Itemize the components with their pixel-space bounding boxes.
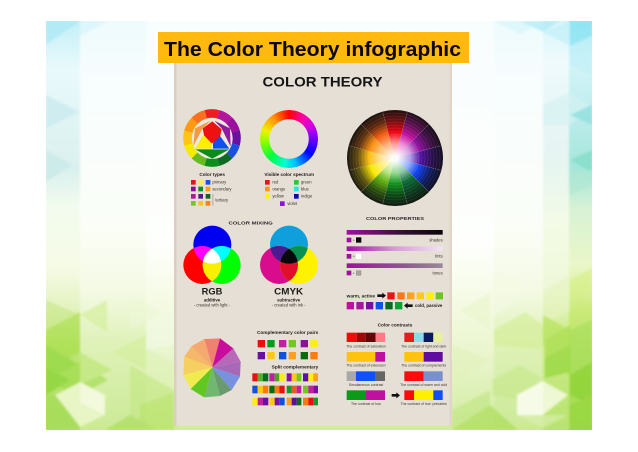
color contrasts xyxy=(346,323,447,406)
poster: color theory xyxy=(174,63,452,426)
CMYK labels: subtractive xyxy=(277,297,301,302)
color properties: tones xyxy=(432,270,443,275)
visible spectrum ring xyxy=(260,110,318,168)
poster heading: COLOR THEORY xyxy=(262,74,383,90)
color properties: tints xyxy=(435,254,443,259)
color contrasts: The contrast of hue xyxy=(351,402,381,406)
color properties: shades xyxy=(429,237,443,242)
visible spectrum legend: Visible color spectrum xyxy=(264,172,314,177)
complementary color pairs xyxy=(257,330,319,359)
visible spectrum legend xyxy=(264,172,314,206)
title banner xyxy=(158,32,469,63)
RGB labels: RGB xyxy=(202,287,223,297)
color mixing: COLOR MIXING xyxy=(228,221,273,227)
color contrasts: The contrast of light and dark xyxy=(401,344,446,348)
visible spectrum legend: green xyxy=(301,179,312,184)
split complementary swatches: Split complementary xyxy=(272,364,319,369)
visible spectrum legend: yellow xyxy=(272,194,285,199)
CMYK labels: CMYK xyxy=(274,287,304,297)
visible spectrum legend: blue xyxy=(301,186,310,191)
color types legend: Color types xyxy=(199,172,225,177)
title banner: The Color Theory infographic xyxy=(164,39,461,61)
color contrasts: Color contrasts xyxy=(378,323,413,329)
warm and cold swatches: warm, active xyxy=(346,294,375,300)
visible spectrum legend: orange xyxy=(272,186,286,191)
RGB labels: additive xyxy=(204,297,221,302)
CMYK labels xyxy=(272,287,306,307)
color properties: + xyxy=(353,254,356,259)
visible spectrum legend: indigo xyxy=(301,194,313,199)
color contrasts: The contrast of warm and cold xyxy=(400,383,447,387)
warm and cold swatches xyxy=(346,292,443,309)
color types legend: primary xyxy=(212,179,227,184)
large tint and shade wheel xyxy=(347,110,443,206)
complementary wheel xyxy=(183,338,241,397)
color types legend: tertiary xyxy=(215,198,229,203)
color mixing xyxy=(183,221,318,307)
visible spectrum legend: violet xyxy=(287,201,298,206)
color contrasts: The contrast of complements xyxy=(401,364,446,368)
color types legend xyxy=(191,172,232,206)
RGB additive diagram xyxy=(183,226,241,284)
color contrasts: The contrast of saturation xyxy=(346,344,386,348)
CMYK labels: - created with ink - xyxy=(272,302,306,307)
color properties: + xyxy=(353,270,356,275)
color properties: + xyxy=(353,237,356,242)
color wheel with primary triangle xyxy=(177,103,247,173)
color types legend: secondary xyxy=(212,186,232,191)
color contrasts: Simultaneous contrast xyxy=(349,383,383,387)
visible spectrum legend: red xyxy=(272,179,279,184)
slide artwork xyxy=(46,21,592,430)
color contrasts: The contrast of hue: primaries xyxy=(401,402,447,406)
complementary color pairs: Complementary color pairs xyxy=(257,330,319,335)
primary and secondary shapes xyxy=(192,118,233,159)
warm and cold swatches: cold, passive xyxy=(415,303,443,309)
split complementary swatches xyxy=(252,364,319,405)
color contrasts: The contrast of extension xyxy=(346,364,386,368)
RGB labels xyxy=(194,287,231,307)
CMYK subtractive diagram xyxy=(260,226,318,284)
color properties xyxy=(347,216,443,275)
color properties: COLOR PROPERTIES xyxy=(366,216,425,222)
RGB labels: - created with light - xyxy=(194,302,231,307)
